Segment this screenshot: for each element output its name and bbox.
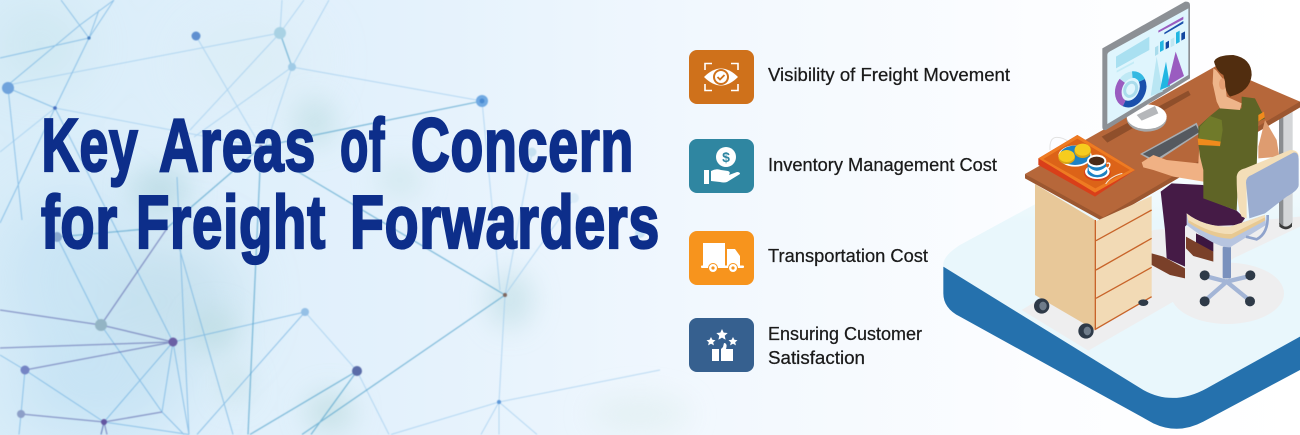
title: Freight	[136, 180, 326, 264]
near shoe	[1152, 253, 1185, 278]
label: ensuring customer satisfaction: Ensuring Customer	[768, 324, 922, 344]
pedestal wheels	[1034, 298, 1148, 339]
network nodes	[2, 27, 645, 425]
title	[41, 103, 660, 264]
screen charts	[1114, 17, 1185, 108]
icon: stars and thumbs up	[706, 329, 738, 361]
far shoe	[1186, 237, 1213, 262]
title: Forwarders	[350, 180, 660, 264]
item: inventory management cost	[689, 139, 997, 193]
pants	[1161, 183, 1245, 267]
right arm	[1258, 120, 1279, 158]
shirt sleeve	[1198, 116, 1223, 147]
sleeve bands	[1198, 112, 1265, 146]
chair bracket	[1246, 215, 1268, 239]
monitor shadow	[1102, 91, 1191, 143]
title: of	[340, 103, 385, 187]
monitor	[1102, 2, 1190, 130]
illustration: person working at desk on platform	[943, 2, 1300, 429]
item: transportation cost	[689, 231, 928, 285]
desk leg	[1279, 110, 1293, 229]
donut chart	[1114, 71, 1148, 108]
item: ensuring customer satisfaction	[689, 318, 922, 372]
desk top	[1025, 66, 1300, 222]
platform	[943, 147, 1300, 429]
item: inventory management cost: Inventory Management Cost	[768, 155, 997, 175]
title: Key	[42, 103, 138, 187]
far lower leg	[1196, 233, 1213, 252]
chair base	[1205, 276, 1250, 301]
chair	[1187, 150, 1299, 306]
tray with plates and coffee cup	[1038, 135, 1135, 197]
label: ensuring customer satisfaction: Satisfaction	[768, 348, 865, 368]
title: Concern	[411, 103, 634, 187]
icon: truck	[701, 243, 744, 272]
keyboard	[1140, 123, 1201, 163]
icon: hand with coin: $	[722, 149, 730, 165]
chair pole	[1223, 247, 1231, 278]
network lines background	[0, 0, 660, 434]
floor shadows	[1022, 217, 1300, 351]
chair seat	[1187, 213, 1266, 247]
label: ensuring customer satisfaction	[768, 324, 922, 368]
title: Areas	[159, 103, 316, 187]
item: transportation cost: Transportation Cost	[768, 246, 928, 266]
face and neck	[1213, 68, 1242, 110]
left forearm and hand	[1142, 145, 1220, 182]
monitor stand	[1127, 104, 1167, 132]
chair casters	[1200, 270, 1255, 306]
icon: hand with coin	[704, 147, 740, 184]
shirt	[1198, 97, 1265, 211]
icon: eye with check	[704, 64, 738, 90]
item: visibility of freight movement	[689, 50, 1010, 104]
item: visibility of freight movement: Visibility of Freight Movement	[768, 65, 1010, 85]
title: for	[41, 180, 118, 264]
hair	[1214, 55, 1252, 97]
person	[1142, 55, 1279, 278]
ear	[1219, 78, 1226, 90]
chair back	[1237, 150, 1299, 218]
desk pedestal with drawers	[1035, 184, 1152, 330]
